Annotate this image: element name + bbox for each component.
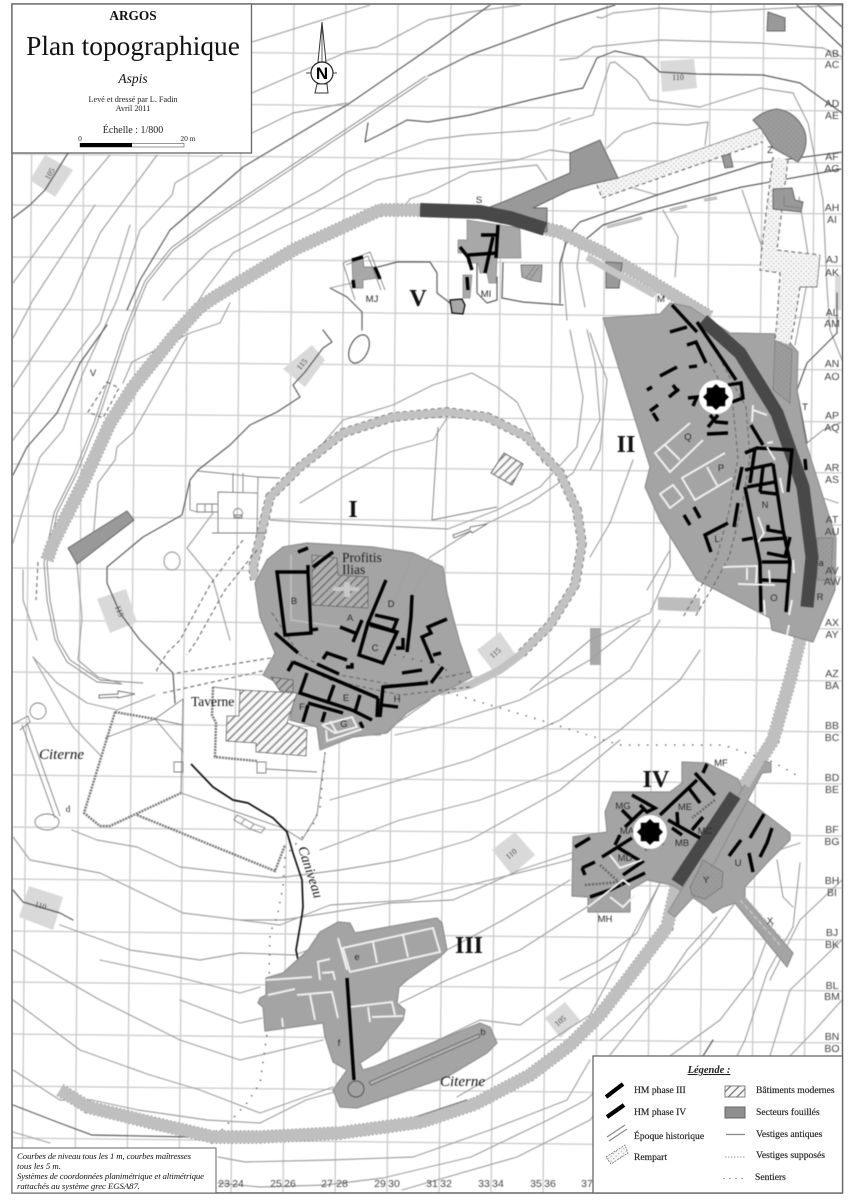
rampart dark section IV — [677, 795, 735, 883]
credit — [88, 95, 178, 113]
right grid coordinates: AT — [826, 514, 839, 526]
sector I — [255, 543, 472, 750]
credit: Levé et dressé par L. Fadin — [88, 95, 178, 104]
sector IV: MB — [675, 838, 689, 849]
sector IV: MH — [598, 914, 613, 925]
bottom grid coordinates: 33 — [478, 1178, 490, 1190]
right grid coordinates: AO — [824, 371, 840, 383]
altitude numbers: 105 — [43, 166, 57, 181]
sector II: T — [802, 402, 808, 413]
stippled rampart northeast and Z bastion — [597, 12, 820, 345]
right grid coordinates: AM — [824, 318, 840, 330]
right grid coordinates: AR — [825, 462, 840, 474]
arrows — [99, 524, 487, 698]
title panel — [12, 4, 252, 153]
title: site name: ARGOS — [109, 8, 157, 23]
walls of sector I: F — [299, 702, 305, 713]
sector II: Q — [684, 432, 692, 443]
legend: Époque historique: Époque historique — [634, 1130, 704, 1142]
bottom grid coordinates: 30 — [388, 1178, 400, 1190]
altitude numbers — [34, 73, 684, 1028]
bottom grid coordinates: 23 — [218, 1178, 230, 1190]
right grid coordinates: AP — [825, 410, 839, 422]
legend: Sentiers — [724, 1172, 786, 1183]
walls of sector I: G — [340, 719, 348, 730]
legend: Secteurs fouillés: Secteurs fouillés — [756, 1107, 820, 1118]
altitude numbers: 105 — [553, 1014, 568, 1028]
legend title: Légende : — [687, 1065, 730, 1076]
sector III: f — [338, 1038, 341, 1049]
sector IV: MF — [714, 758, 728, 769]
notes panel: Courbes de niveau tous les 1 m, courbes maîtresses — [17, 1151, 192, 1161]
altitude numbers: 110 — [504, 847, 519, 861]
hatched building north — [491, 453, 523, 485]
legend: Rempart: Rempart — [634, 1152, 667, 1163]
right grid coordinates: BH — [825, 875, 839, 887]
legend: Vestiges antiques: Vestiges antiques — [756, 1129, 823, 1140]
credit: Avril 2011 — [116, 104, 150, 113]
Caniveau channel: Caniveau — [294, 845, 325, 900]
sector II: a — [818, 558, 824, 569]
right grid coordinates: AB — [825, 48, 839, 60]
Taverne enclosure and walls — [84, 687, 325, 871]
dashed supposed walls — [88, 382, 277, 693]
altitude numbers: 110 — [672, 73, 684, 82]
sector IV: X — [767, 916, 774, 927]
notes panel: Systèmes de coordonnées planimétrique et altimétrique — [17, 1171, 204, 1181]
sector III: e — [354, 952, 360, 963]
scale bar: 20 m — [180, 134, 196, 143]
right grid coordinates: BN — [825, 1031, 839, 1043]
sector II — [603, 294, 836, 642]
walls of sector I: D — [388, 599, 395, 610]
altitude patches — [19, 59, 841, 1038]
label: Taverne: Taverne — [191, 694, 234, 709]
legend: Vestiges supposés — [725, 1150, 825, 1161]
legend: Bâtiments modernes: Bâtiments modernes — [756, 1085, 835, 1096]
notes panel: tous les 5 m. — [17, 1161, 61, 1171]
scale text: Échelle : 1/800 — [103, 124, 163, 136]
sector labels I and III — [348, 497, 483, 959]
sector IV: MA — [620, 826, 635, 837]
sector IV: MD — [618, 853, 633, 864]
right grid coordinates: BK — [825, 939, 839, 951]
ancient road — [44, 5, 842, 684]
walls of sector I: H — [394, 694, 401, 705]
Taverne hatched building — [226, 690, 307, 756]
sector II: L — [714, 534, 720, 545]
north arrow: N — [316, 64, 328, 83]
bottom grid coordinates: 34 — [492, 1178, 504, 1190]
legend: Secteurs fouillés — [725, 1107, 820, 1118]
sector II: R — [817, 592, 824, 603]
sector II: M — [657, 294, 665, 305]
right grid coordinates: AN — [825, 358, 839, 370]
right grid coordinates: AK — [825, 267, 839, 279]
right grid coordinates: AL — [826, 307, 839, 319]
subtitle: Aspis — [117, 71, 148, 86]
legend: Vestiges antiques — [726, 1129, 823, 1140]
right grid coordinates: AE — [825, 110, 839, 122]
marker star sector II — [699, 380, 733, 414]
right grid coordinates: AI — [827, 214, 837, 226]
north arrow — [306, 22, 337, 93]
sector V and gate S: S — [476, 195, 482, 206]
right grid coordinates: AH — [825, 202, 839, 214]
right grid coordinates: AS — [825, 474, 839, 486]
sector II: P — [718, 463, 724, 474]
right grid coordinates: BJ — [826, 927, 838, 939]
inner rampart ring — [253, 412, 582, 692]
sector IV: IV — [643, 767, 670, 793]
right grid coordinates: BM — [824, 991, 840, 1003]
right grid coordinates: AV — [825, 565, 839, 577]
scale bar — [78, 134, 196, 147]
right grid coordinates: BG — [824, 836, 840, 848]
sector V and gate S: MI — [481, 289, 491, 300]
right grid coordinates — [824, 48, 840, 1055]
stippled rampart northeast and Z bastion: Z — [767, 145, 773, 156]
right grid coordinates: BD — [825, 772, 840, 784]
title: plan heading: Plan topographique — [26, 31, 240, 61]
right grid coordinates: BE — [825, 784, 839, 796]
outer rampart — [36, 210, 807, 1137]
right grid coordinates: BA — [825, 680, 839, 692]
walls of sector I: E — [343, 693, 349, 704]
walls of sector I: C — [372, 643, 379, 654]
sector IV: U — [735, 858, 742, 869]
sector IV: Y — [703, 875, 710, 886]
right grid coordinates: AW — [824, 576, 840, 588]
chapel building remains — [190, 471, 280, 533]
bottom grid coordinates: 27 — [321, 1178, 333, 1190]
altitude numbers: 110 — [34, 900, 47, 911]
label: Profitis Ilias: Profitis — [342, 550, 382, 565]
bottom grid coordinates: 25 — [270, 1178, 282, 1190]
label: Profitis Ilias — [342, 550, 382, 577]
marker star sector IV — [633, 815, 667, 849]
bottom grid coordinates: 37 — [581, 1178, 593, 1190]
sector V and gate S — [68, 140, 655, 564]
bottom grid coordinates: 36 — [544, 1178, 556, 1190]
scale bar: 0 — [78, 134, 82, 143]
altitude numbers: 115 — [113, 604, 126, 618]
sector labels I and III: III — [455, 933, 483, 959]
paths dotted — [222, 690, 800, 1130]
sector IV — [572, 745, 793, 967]
altitude numbers: 115 — [295, 357, 309, 372]
right grid coordinates: AZ — [825, 668, 839, 680]
legend: HM phase IV: HM phase IV — [634, 1107, 686, 1118]
sector labels I and III: I — [348, 497, 358, 523]
right grid coordinates: BC — [825, 732, 840, 744]
Citerne west: d — [66, 805, 71, 815]
legend panel — [593, 1056, 842, 1193]
legend: Bâtiments modernes — [725, 1085, 835, 1097]
bottom grid coordinates: 24 — [232, 1178, 244, 1190]
sector V and gate S: V — [409, 286, 427, 312]
right grid coordinates: AY — [825, 629, 839, 641]
right grid coordinates: AU — [825, 526, 839, 538]
Citerne west: Citerne — [39, 747, 84, 763]
right grid coordinates: AG — [824, 163, 840, 175]
rampart dark section east — [703, 320, 812, 607]
sector III: Citerne — [440, 1074, 485, 1090]
legend: HM phase IV — [607, 1105, 686, 1118]
right grid coordinates: BF — [825, 824, 839, 836]
walls of sector I — [275, 548, 447, 741]
sector III: b — [480, 1027, 486, 1038]
right grid coordinates: AF — [825, 151, 839, 163]
sector IV: MC — [698, 826, 713, 837]
sector II: II — [617, 432, 635, 458]
sector II: O — [770, 593, 778, 604]
legend: Rempart — [606, 1145, 667, 1164]
sector V and gate S: V — [90, 368, 97, 379]
notes panel — [12, 1148, 216, 1193]
right grid coordinates: AQ — [824, 422, 840, 434]
bottom grid coordinates: 32 — [440, 1178, 452, 1190]
sector IV: MG — [615, 801, 631, 812]
sector III — [258, 918, 497, 1108]
right grid coordinates: AD — [825, 98, 840, 110]
bottom grid coordinates: 29 — [374, 1178, 386, 1190]
walls of sector I: A — [347, 613, 354, 624]
right grid coordinates: BB — [825, 720, 839, 732]
bottom grid coordinates: 26 — [284, 1178, 296, 1190]
legend: Sentiers: Sentiers — [755, 1172, 786, 1183]
walls of sector I: B — [291, 596, 297, 607]
legend: HM phase III — [606, 1084, 686, 1097]
sector V and gate S: MJ — [366, 294, 379, 305]
notes panel: rattachés au système grec EGSA87. — [17, 1181, 140, 1191]
bottom grid coordinates: 31 — [426, 1178, 438, 1190]
right grid coordinates: BI — [827, 887, 837, 899]
bottom grid coordinates: 28 — [336, 1178, 348, 1190]
Citerne west — [13, 703, 84, 830]
bottom grid coordinates: 35 — [530, 1178, 542, 1190]
legend: Vestiges supposés: Vestiges supposés — [756, 1150, 825, 1161]
sector IV: ME — [678, 802, 692, 813]
Caniveau channel — [191, 764, 347, 989]
right grid coordinates: AX — [825, 617, 839, 629]
right grid coordinates: AC — [825, 59, 840, 71]
right grid coordinates: AJ — [826, 254, 838, 266]
sector II: N — [762, 500, 769, 511]
altitude numbers: 115 — [488, 646, 503, 660]
legend: Époque historique — [607, 1125, 704, 1142]
bottom grid coordinates — [218, 1178, 593, 1190]
label: Profitis Ilias: Ilias — [342, 562, 365, 577]
legend: HM phase III: HM phase III — [634, 1085, 686, 1096]
right grid coordinates: BO — [824, 1043, 840, 1055]
right grid coordinates: BL — [826, 980, 839, 992]
